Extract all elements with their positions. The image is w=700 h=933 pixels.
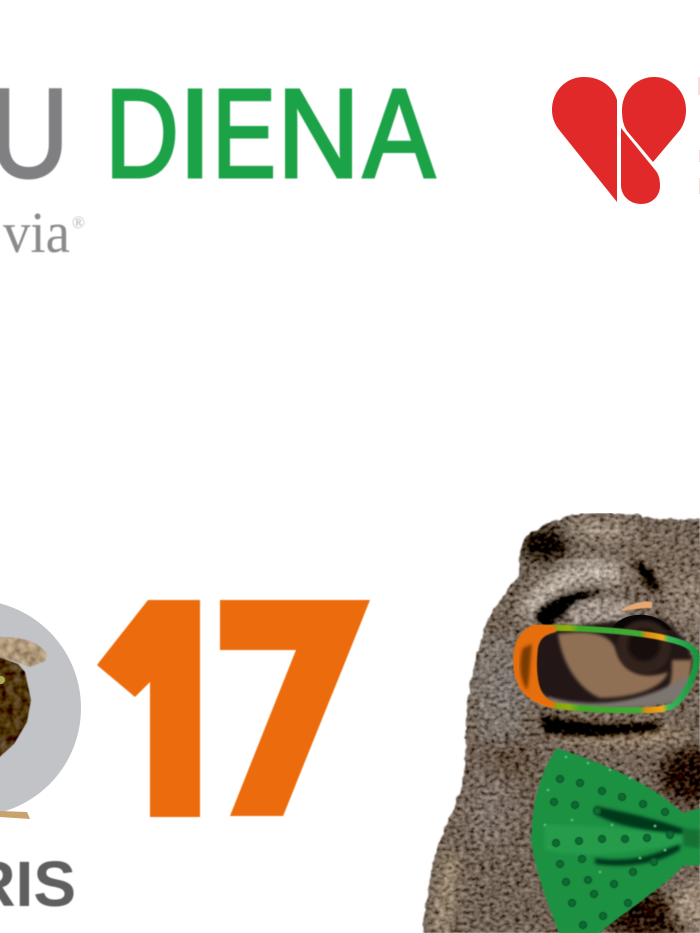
owl eye [0,676,5,684]
badge: grey circle with small owl [0,600,81,819]
colourful glasses frame [524,628,696,710]
bow tie specks [544,756,666,873]
big number 17 [96,599,370,818]
digit 7: 7 [205,548,377,881]
illustration: owl photo with glasses and bow tie [422,513,700,933]
green word DIENA: D [105,63,179,204]
bow tie dots [550,776,674,928]
owl perch [0,811,30,819]
logo wordmark: U DIENA [0,63,435,204]
digit 1: 1 [74,547,273,880]
tagline fragment: via: via [3,200,70,265]
green bow tie [531,748,700,933]
owl fur body [422,513,700,933]
owl eye region [530,601,692,709]
green word DIENA: N [277,63,360,204]
green word DIENA [105,63,435,204]
icon: small owl [0,637,47,762]
bow tie folds [595,806,684,866]
registered mark: ® [72,213,85,232]
icon: red heart logo [552,77,686,204]
green word DIENA: A [363,63,435,204]
red logo edge sliver [698,77,700,194]
green word DIENA: E [212,63,276,204]
green word DIENA: I [178,63,212,204]
left thick lens rim [513,625,556,708]
